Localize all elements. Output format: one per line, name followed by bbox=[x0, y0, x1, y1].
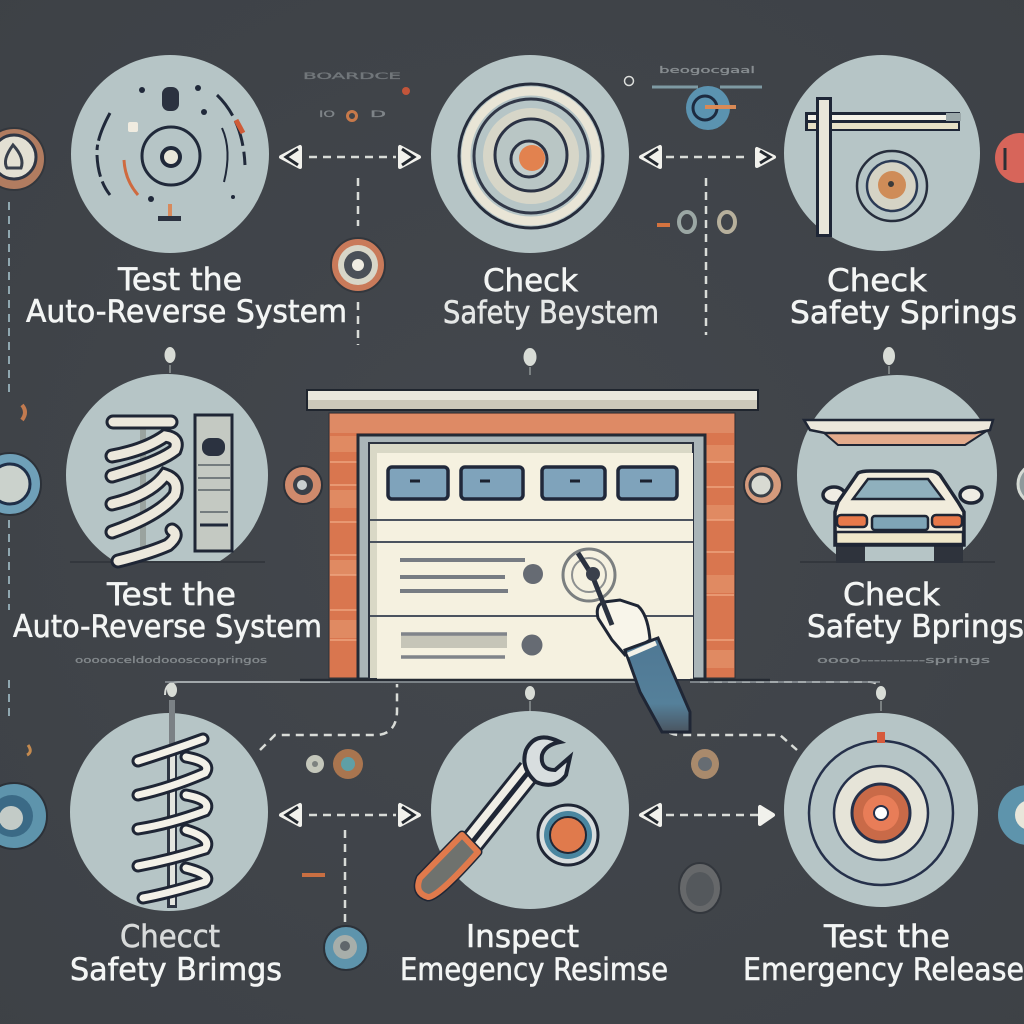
icon: blue target top bbox=[652, 86, 762, 130]
garage illustration bbox=[165, 390, 880, 732]
icon: lower badges bbox=[306, 749, 363, 779]
hand with screwdriver bbox=[597, 600, 650, 655]
icon: tan badge bbox=[691, 749, 719, 779]
heading: check safety beams bbox=[443, 263, 659, 331]
icon: blue badge left lower bbox=[0, 783, 47, 849]
ground line bbox=[300, 679, 770, 681]
heading: check safety springs top bbox=[790, 263, 1017, 331]
heading: check safety springs middle: Check bbox=[843, 577, 940, 613]
door frame bbox=[358, 435, 705, 679]
panel: bracket and pulley top-right bbox=[784, 55, 980, 251]
icon: red badge right bbox=[995, 133, 1024, 183]
icon: small ring bbox=[624, 76, 634, 86]
icon: grey badge right bbox=[1018, 464, 1024, 504]
faint caption labels: D bbox=[370, 110, 386, 120]
icon: copper badge by garage right bbox=[744, 466, 782, 504]
icon: copper badge by garage left bbox=[284, 466, 322, 504]
faint caption labels: IO bbox=[319, 110, 335, 120]
heading: test emergency release: Test the bbox=[823, 919, 950, 955]
icon: flame badge bbox=[0, 128, 45, 190]
faint caption labels: BOARDCE bbox=[303, 72, 402, 82]
panel: coil spring bottom-left bbox=[70, 700, 268, 911]
icon: blue badge right lower bbox=[998, 785, 1024, 845]
heading: test auto-reverse top: Auto-Reverse System bbox=[26, 294, 347, 330]
panel: car under shelf middle-right bbox=[797, 375, 997, 575]
panel: emergency release bottom-right bbox=[784, 713, 978, 907]
icon: blue badge bottom bbox=[324, 926, 368, 970]
faint caption labels: beogocgaal bbox=[659, 66, 755, 76]
heading: check safety springs bottom: Safety Brimgs bbox=[70, 952, 282, 988]
icon: tiny marks bbox=[22, 87, 410, 875]
heading: inspect emergency: Inspect bbox=[466, 919, 579, 955]
panel: coil spring and control unit middle-left bbox=[66, 374, 268, 576]
panel: auto-reverse system top-left bbox=[71, 55, 269, 253]
heading: check safety beams: Check bbox=[483, 263, 578, 299]
faint caption labels bbox=[75, 66, 991, 666]
faint caption labels: oooooceldodoooscoopringos bbox=[75, 656, 267, 666]
heading: test auto-reverse top: Test the bbox=[117, 262, 242, 298]
dashed connectors bbox=[9, 157, 881, 925]
heading: check safety springs middle bbox=[807, 577, 1024, 645]
heading: check safety springs bottom bbox=[70, 919, 282, 988]
icon: drop pins bbox=[164, 347, 895, 700]
dial bbox=[563, 549, 615, 601]
brick wall bbox=[329, 413, 735, 678]
faint caption labels: oooo----------springs bbox=[817, 656, 991, 666]
heading: test auto-reverse middle: Test the bbox=[106, 577, 236, 613]
heading: test auto-reverse top bbox=[26, 262, 347, 330]
roof slab bbox=[307, 390, 758, 410]
heading: test auto-reverse middle bbox=[13, 577, 322, 645]
door panels bbox=[377, 453, 693, 679]
door windows bbox=[388, 467, 677, 499]
heading: check safety springs top: Check bbox=[827, 263, 927, 299]
heading: check safety beams: Safety Beystem bbox=[443, 295, 659, 331]
heading: inspect emergency bbox=[400, 919, 668, 988]
heading: check safety springs bottom: Checct bbox=[120, 919, 220, 955]
heading: test auto-reverse middle: Auto-Reverse System bbox=[13, 609, 322, 645]
heading: test emergency release bbox=[743, 919, 1024, 988]
icon: target copper bbox=[331, 238, 385, 292]
icon: blue badge left bbox=[0, 453, 41, 515]
panel: wrench bottom-center bbox=[418, 711, 629, 909]
arrows bbox=[281, 147, 774, 825]
heading: check safety springs top: Safety Springs bbox=[790, 295, 1017, 331]
panel: safety beams top-center bbox=[431, 55, 629, 253]
icon: dim badge bbox=[679, 863, 721, 913]
icon: small pair top right bbox=[657, 212, 735, 232]
door slots and knobs bbox=[400, 560, 525, 591]
sleeve bbox=[625, 638, 690, 732]
heading: inspect emergency: Emegency Resimse bbox=[400, 952, 668, 988]
